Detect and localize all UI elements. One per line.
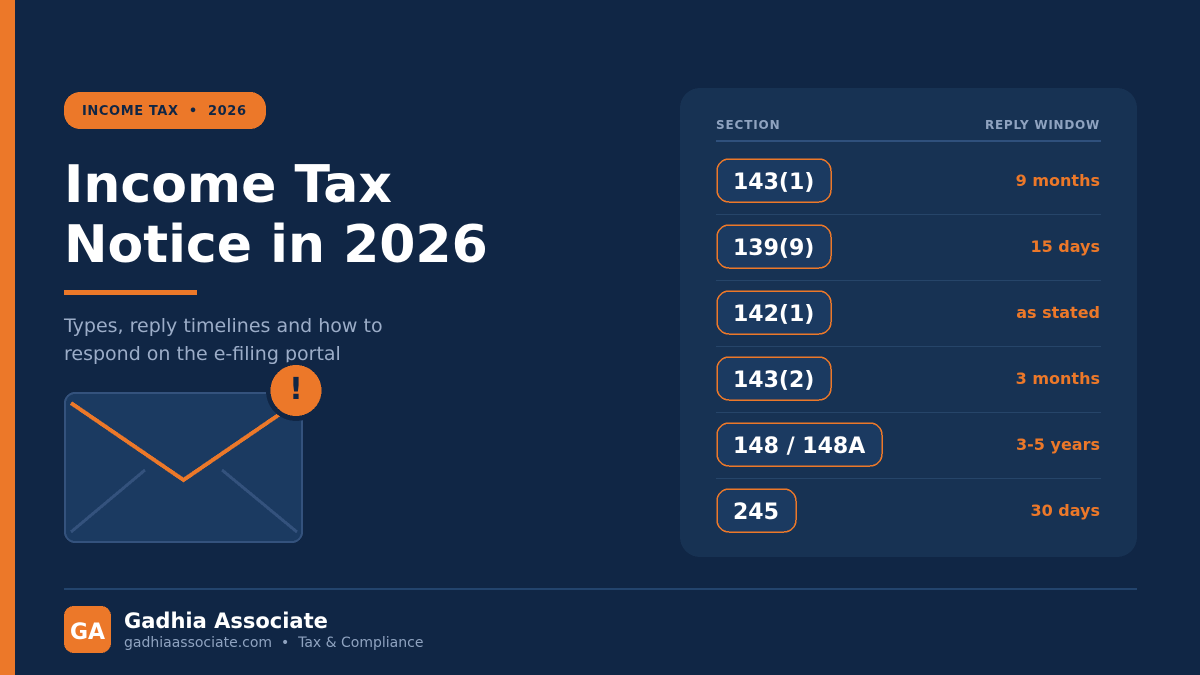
accent bar <box>0 0 15 675</box>
row: 245: 30 days <box>1030 501 1100 520</box>
footer brand text <box>124 609 423 651</box>
title underline <box>64 290 197 295</box>
badge: income tax 2026: INCOME TAX • 2026 <box>82 104 247 119</box>
table header <box>716 118 1101 142</box>
row: 143(2) <box>716 357 1101 413</box>
row: 148 / 148A: 148 / 148A <box>733 434 865 459</box>
title: Income Tax <box>64 155 392 215</box>
table header: SECTION <box>716 118 780 132</box>
row: 142(1): as stated <box>1016 303 1100 322</box>
footer logo <box>64 606 111 653</box>
footer brand text: Gadhia Associate <box>124 609 328 633</box>
row: 143(1) <box>716 159 1101 215</box>
row: 143(1): 9 months <box>1016 171 1100 190</box>
icon: alert badge: ! <box>289 372 303 407</box>
row: 139(9): 139(9) <box>733 236 814 261</box>
row: 143(2): 143(2) <box>733 368 814 393</box>
row: 245: 245 <box>733 500 779 525</box>
row: 143(1): 143(1) <box>733 170 814 195</box>
footer brand text: gadhiaassociate.com • Tax & Compliance <box>124 635 423 651</box>
footer divider <box>64 588 1137 590</box>
row: 139(9): 15 days <box>1030 237 1100 256</box>
icon: alert badge <box>266 361 326 421</box>
row: 148 / 148A <box>716 423 1101 479</box>
row: 245 <box>717 489 1100 532</box>
badge: income tax 2026 <box>64 92 266 129</box>
row: 148 / 148A: 3-5 years <box>1016 435 1100 454</box>
icon: envelope with alert <box>65 361 326 542</box>
panel: section table <box>680 88 1137 557</box>
row: 143(2): 3 months <box>1016 369 1100 388</box>
footer logo: GA <box>70 620 105 645</box>
subtitle <box>63 315 383 365</box>
row: 139(9) <box>716 225 1101 281</box>
table header: REPLY WINDOW <box>985 118 1100 132</box>
row: 142(1): 142(1) <box>733 302 814 327</box>
title <box>64 155 488 275</box>
subtitle: Types, reply timelines and how to <box>63 315 383 337</box>
title: Notice in 2026 <box>64 215 488 275</box>
subtitle: respond on the e-filing portal <box>64 343 341 365</box>
row: 142(1) <box>716 291 1101 347</box>
